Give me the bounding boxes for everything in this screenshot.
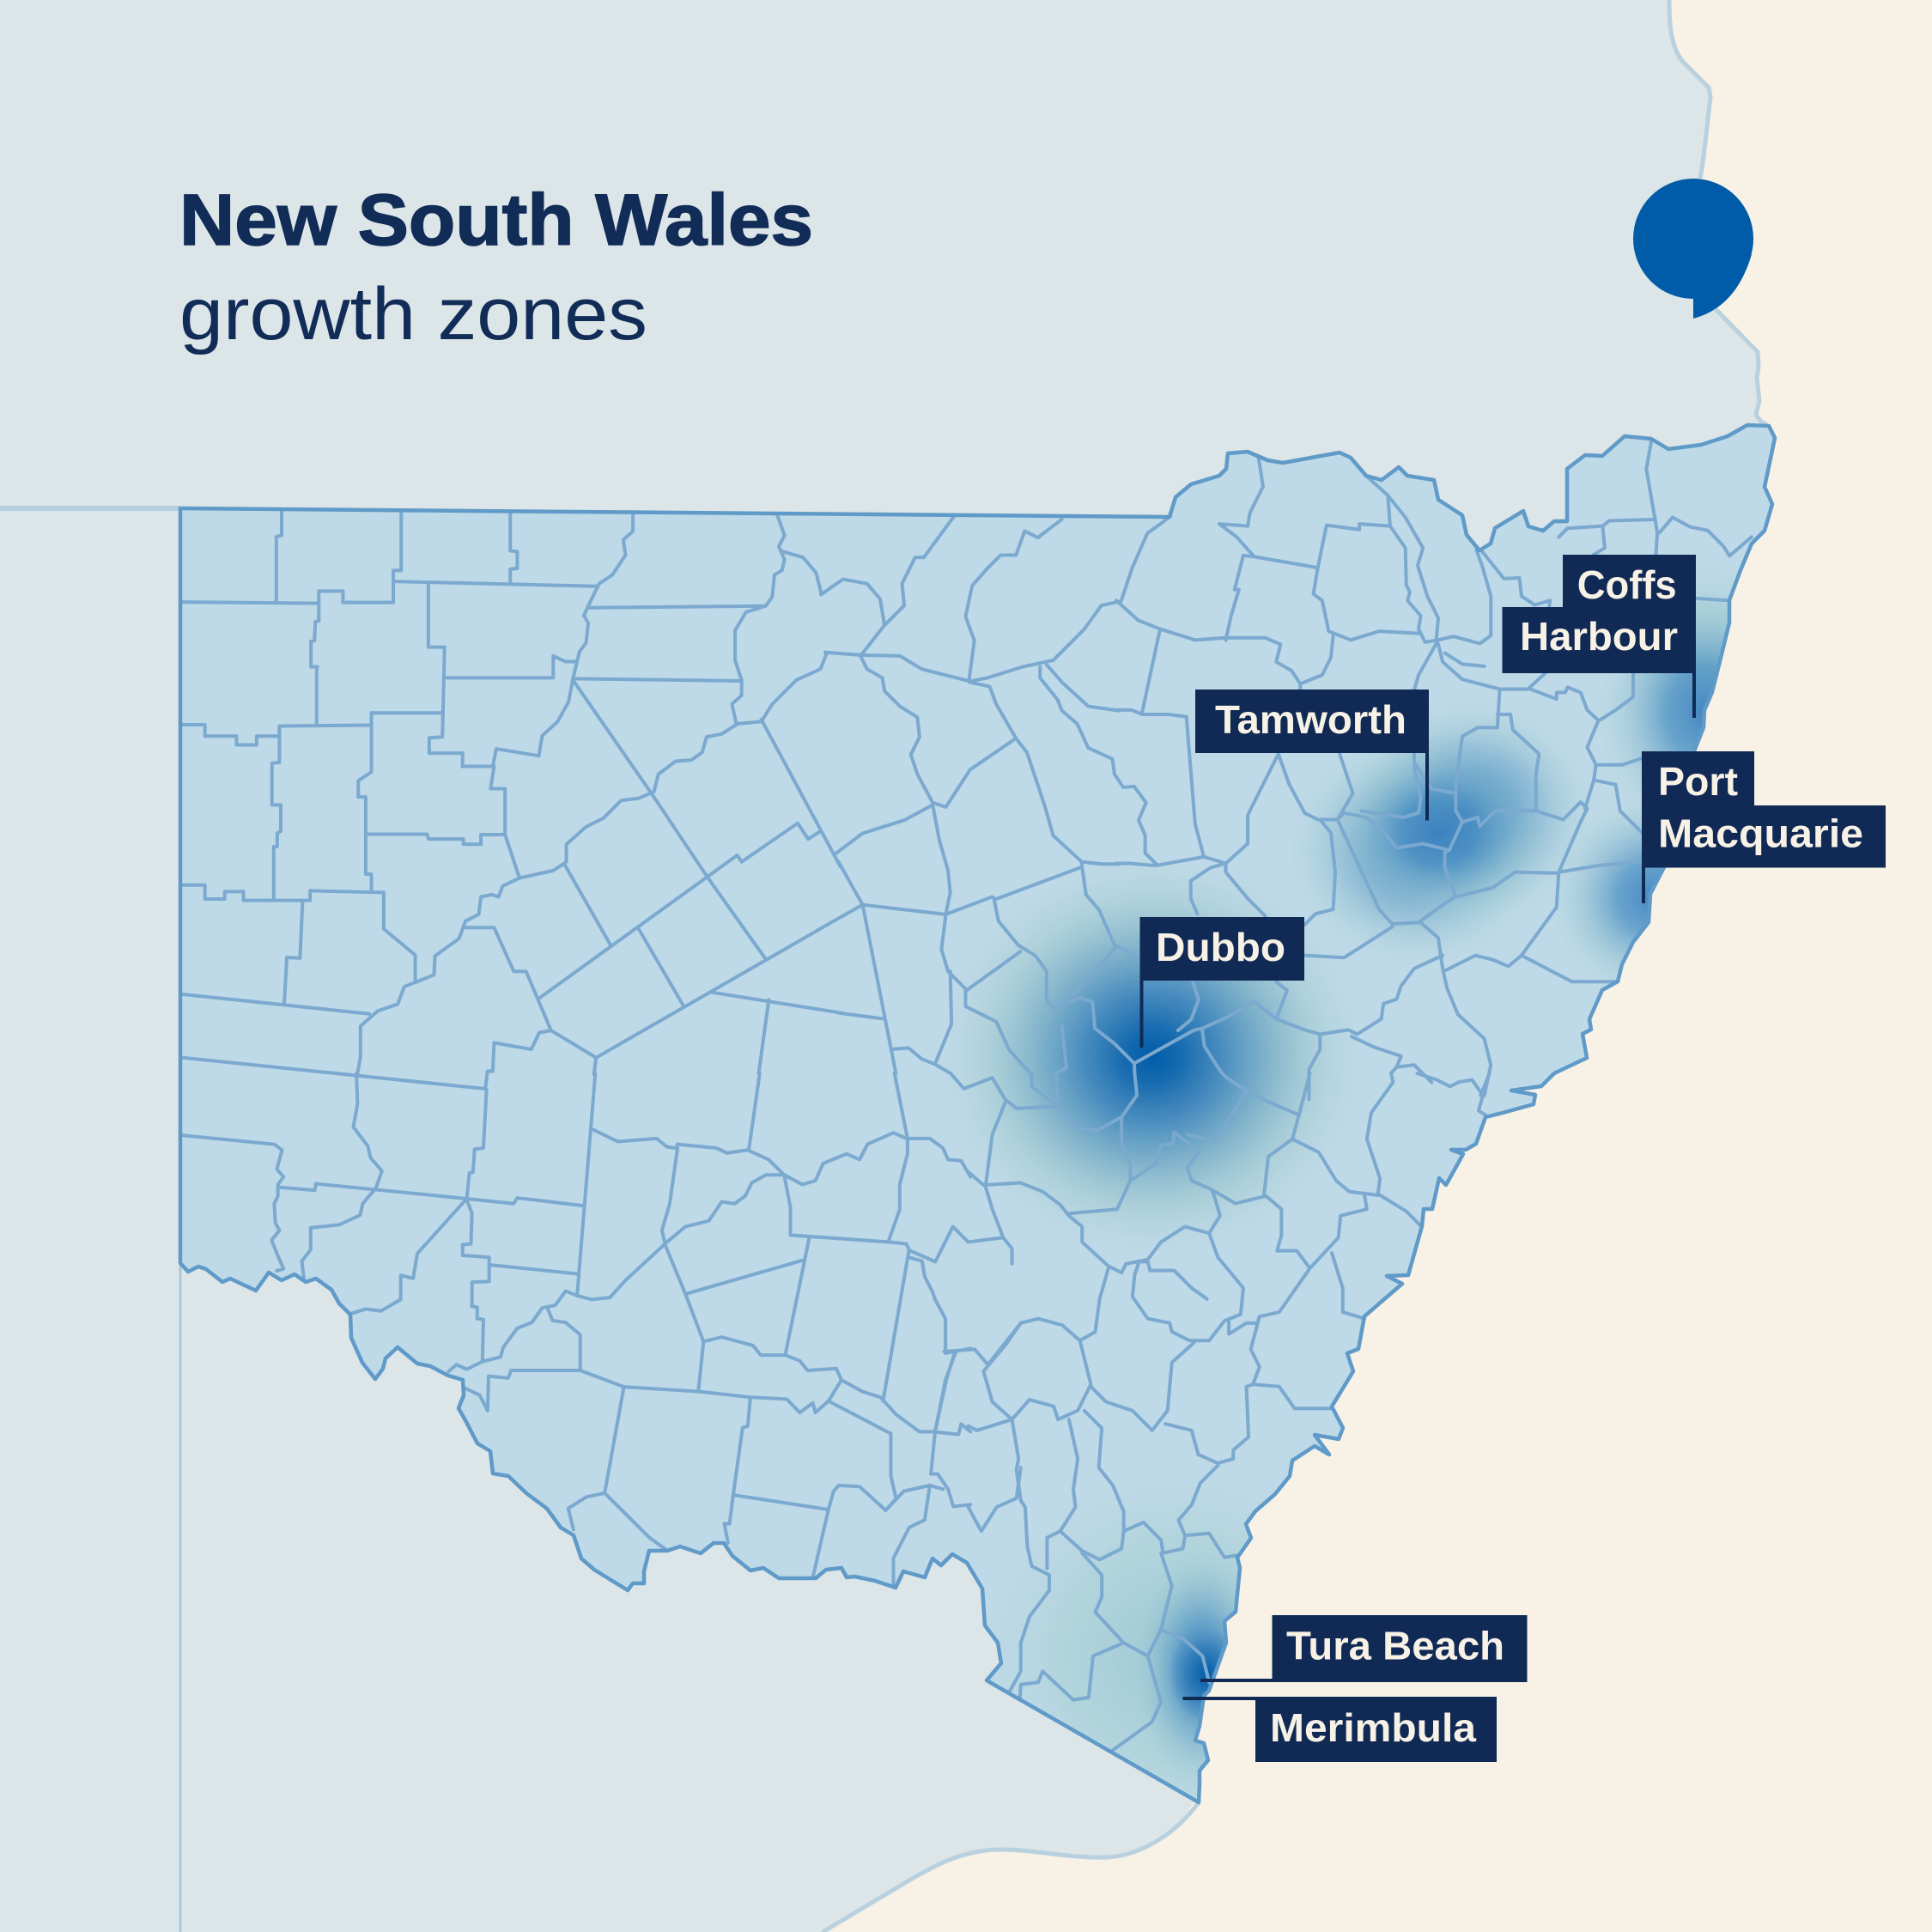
map: New South Wales bbox=[180, 425, 1812, 1838]
title line 1: New South Wales bbox=[179, 179, 813, 260]
title line 2: growth zones bbox=[179, 273, 647, 355]
heat: south coast wide bbox=[1042, 1526, 1247, 1781]
label: Port Macquarie: Macquarie bbox=[1658, 811, 1863, 855]
heat: Tura Beach bbox=[1171, 1633, 1224, 1716]
label: Tamworth: Tamworth bbox=[1215, 697, 1406, 742]
label: Tamworth bbox=[1195, 690, 1429, 821]
boundaries: south east bbox=[910, 1073, 1490, 1750]
label: Port Macquarie bbox=[1642, 751, 1886, 903]
label: Merimbula: Merimbula bbox=[1270, 1705, 1476, 1750]
label: Coffs Harbour: Harbour bbox=[1520, 614, 1678, 659]
label: Dubbo bbox=[1140, 917, 1304, 1048]
heat: Merimbula bbox=[1149, 1571, 1236, 1772]
label: Coffs Harbour bbox=[1503, 555, 1696, 718]
state fill bbox=[180, 425, 1775, 1802]
heat: Coffs Harbour bbox=[1615, 612, 1728, 788]
label: Coffs Harbour: Coffs bbox=[1577, 562, 1677, 607]
heat: Tamworth centre bbox=[1367, 763, 1523, 893]
heat: Tamworth west bbox=[1309, 761, 1506, 946]
label: Merimbula bbox=[1183, 1697, 1497, 1762]
boundaries: central bbox=[821, 516, 1222, 1074]
icon: speech bubble pin bbox=[1633, 179, 1753, 319]
growth heat zones bbox=[970, 590, 1729, 1789]
label: Tura Beach: Tura Beach bbox=[1286, 1624, 1504, 1668]
label: Port Macquarie: Port bbox=[1658, 759, 1738, 804]
boundaries: south west bbox=[183, 1073, 970, 1585]
heat: Dubbo bbox=[970, 885, 1334, 1226]
heat: Tamworth east bbox=[1390, 719, 1573, 893]
heat: Coffs Harbour glow bbox=[1696, 592, 1728, 677]
regional boundaries bbox=[181, 440, 1752, 1750]
title bbox=[179, 179, 813, 355]
label: Dubbo: Dubbo bbox=[1156, 925, 1285, 969]
state outline bbox=[180, 425, 1775, 1802]
heat: Port Macquarie bbox=[1567, 812, 1662, 975]
label: Tura Beach bbox=[1200, 1615, 1527, 1682]
boundaries: north east bbox=[1116, 440, 1752, 1099]
boundaries: north west bbox=[181, 510, 841, 1089]
